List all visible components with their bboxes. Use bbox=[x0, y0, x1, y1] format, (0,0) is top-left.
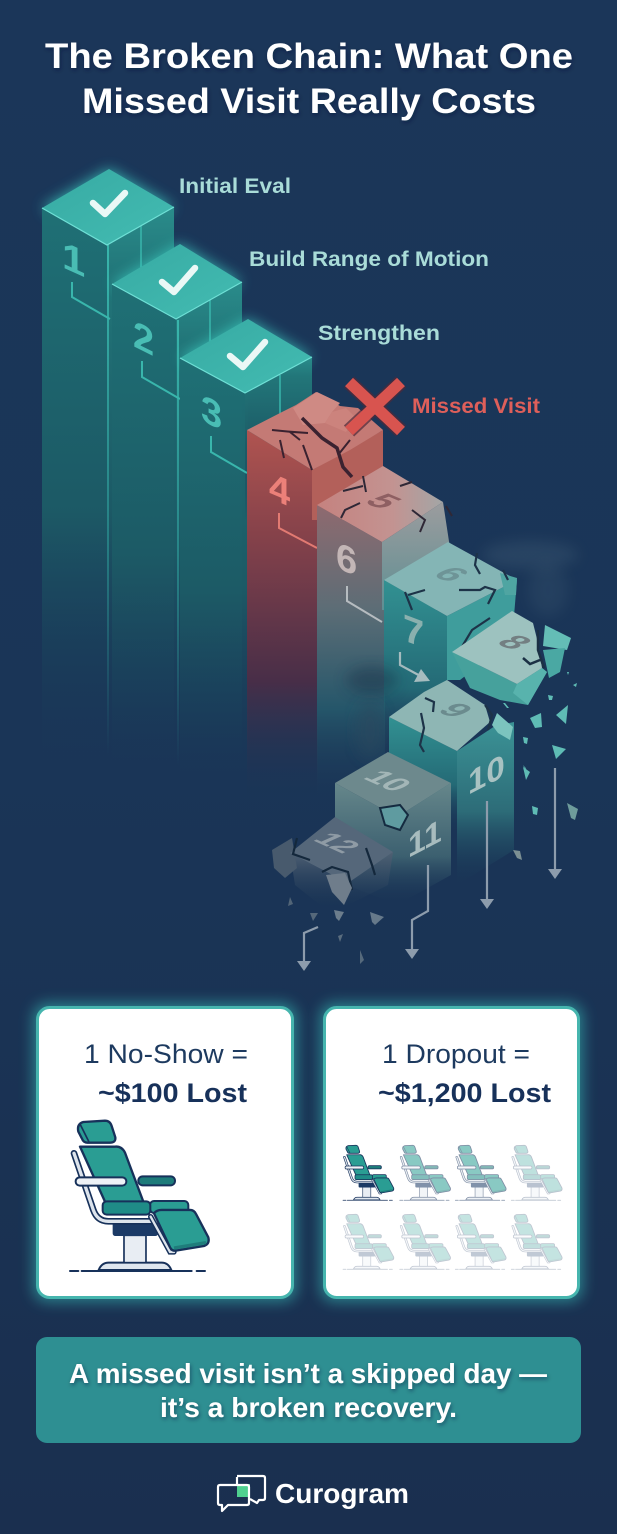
title bbox=[45, 37, 573, 121]
label: Build Range of Motion: Build Range of Motion bbox=[249, 248, 489, 271]
number 6 on top: 6 bbox=[424, 563, 479, 586]
step 9 block bbox=[389, 680, 514, 909]
icon: red X bbox=[349, 382, 401, 431]
callout text: it’s a broken recovery. bbox=[160, 1392, 457, 1423]
check mark 2 bbox=[162, 268, 195, 292]
icon: grid of eight chairs bbox=[343, 1145, 562, 1269]
connector 1 bbox=[72, 282, 110, 319]
connector 6 bbox=[347, 586, 382, 622]
number 3: 3 bbox=[201, 386, 222, 439]
step 12 crumbled block bbox=[272, 817, 393, 971]
label: Strengthen: Strengthen bbox=[318, 322, 440, 345]
number 10 on top: 10 bbox=[356, 766, 421, 795]
wordmark: Curogram bbox=[275, 1478, 409, 1509]
callout banner bbox=[36, 1337, 581, 1443]
no-show heading: 1 No-Show = bbox=[84, 1039, 248, 1069]
number 2: 2 bbox=[133, 312, 154, 365]
connector 4 bbox=[279, 513, 317, 548]
step labels bbox=[179, 175, 540, 418]
label: Initial Eval: Initial Eval bbox=[179, 175, 291, 198]
callout text bbox=[69, 1358, 547, 1423]
number 10 on right face: 10 bbox=[468, 747, 505, 803]
number 6 on face: 6 bbox=[336, 534, 357, 585]
connector arrow 7 bbox=[400, 652, 430, 682]
number 12 on top: 12 bbox=[306, 829, 369, 857]
dropout value: ~$1,200 Lost bbox=[378, 1078, 551, 1108]
connector 2 bbox=[142, 361, 180, 399]
panel: no-show bbox=[33, 1003, 297, 1302]
step 1 column bbox=[42, 169, 174, 760]
number 8 on top: 8 bbox=[488, 631, 540, 654]
number 5 on top: 5 bbox=[356, 490, 411, 513]
step 5-6 fading column bbox=[317, 466, 452, 805]
callout text: A missed visit isn’t a skipped day — bbox=[69, 1358, 547, 1389]
step 4 missed red column bbox=[247, 392, 383, 800]
down arrow 11 bbox=[405, 865, 428, 959]
step 6-7 teal block bbox=[346, 542, 517, 760]
dropout heading: 1 Dropout = bbox=[382, 1039, 530, 1069]
Curogram logo bbox=[218, 1476, 409, 1511]
down arrow 12 bbox=[297, 927, 318, 971]
number 9 on top: 9 bbox=[429, 699, 481, 722]
check mark 3 bbox=[230, 342, 265, 367]
title: The Broken Chain: What One bbox=[45, 37, 573, 76]
step 8 broken slab bbox=[452, 611, 571, 705]
label: Missed Visit: Missed Visit bbox=[412, 395, 540, 418]
number 1: 1 bbox=[62, 233, 85, 286]
number 11 on right face: 11 bbox=[408, 812, 442, 866]
panel: dropout bbox=[320, 1003, 583, 1302]
down arrow 8 bbox=[548, 768, 562, 879]
falling debris bbox=[492, 672, 578, 860]
icon: chat bubbles bbox=[218, 1476, 265, 1511]
number 7 on face: 7 bbox=[403, 606, 424, 657]
step 10-11 block bbox=[335, 752, 451, 959]
smoke bbox=[482, 541, 578, 616]
staircase chart of visits bbox=[42, 169, 578, 971]
check mark 1 bbox=[93, 193, 125, 214]
icon: treatment chair bbox=[70, 1121, 209, 1271]
no-show value: ~$100 Lost bbox=[98, 1078, 247, 1108]
down arrow 10 bbox=[480, 801, 494, 909]
step 3 column bbox=[180, 319, 312, 780]
step 2 column bbox=[112, 244, 242, 770]
title: Missed Visit Really Costs bbox=[82, 82, 536, 121]
connector 3 bbox=[211, 436, 247, 473]
number 4: 4 bbox=[269, 464, 290, 516]
